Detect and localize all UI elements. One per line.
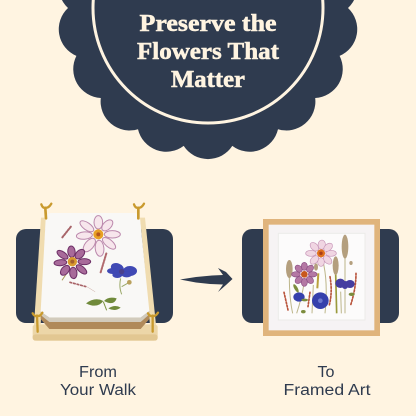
- small leaves: [292, 283, 355, 313]
- dried sprigs: [62, 226, 107, 292]
- label: to framed art: [284, 364, 371, 399]
- label: from your walk: Your Walk: [60, 382, 136, 399]
- leaves: [86, 298, 121, 310]
- grass plumes: [286, 235, 353, 278]
- title: Preserve the: [140, 11, 277, 37]
- title: Matter: [171, 67, 245, 93]
- label: from your walk: From: [79, 364, 117, 381]
- scalloped title badge: [59, 0, 357, 159]
- label: to framed art: To: [318, 364, 334, 381]
- icon: framed pressed-flower art: [263, 219, 380, 336]
- blue flower: [120, 278, 129, 294]
- brass wing bolts: [33, 204, 158, 332]
- title: Flowers That: [137, 39, 279, 65]
- arrow: [180, 268, 232, 292]
- pink flower: [76, 216, 120, 257]
- purple flower: [62, 268, 69, 280]
- blue flowers: [293, 279, 355, 309]
- pink flower: [306, 240, 336, 266]
- label: to framed art: Framed Art: [284, 382, 371, 399]
- stems: [289, 258, 345, 313]
- panel: dark backing behind framed art: [242, 229, 399, 323]
- title: [137, 11, 279, 93]
- label: from your walk: [60, 364, 136, 399]
- panel: dark backing behind flower press: [16, 229, 173, 323]
- purple flower: [292, 262, 317, 286]
- red sprigs: [284, 273, 356, 310]
- icon: wooden flower press with pressed flowers: [33, 204, 158, 341]
